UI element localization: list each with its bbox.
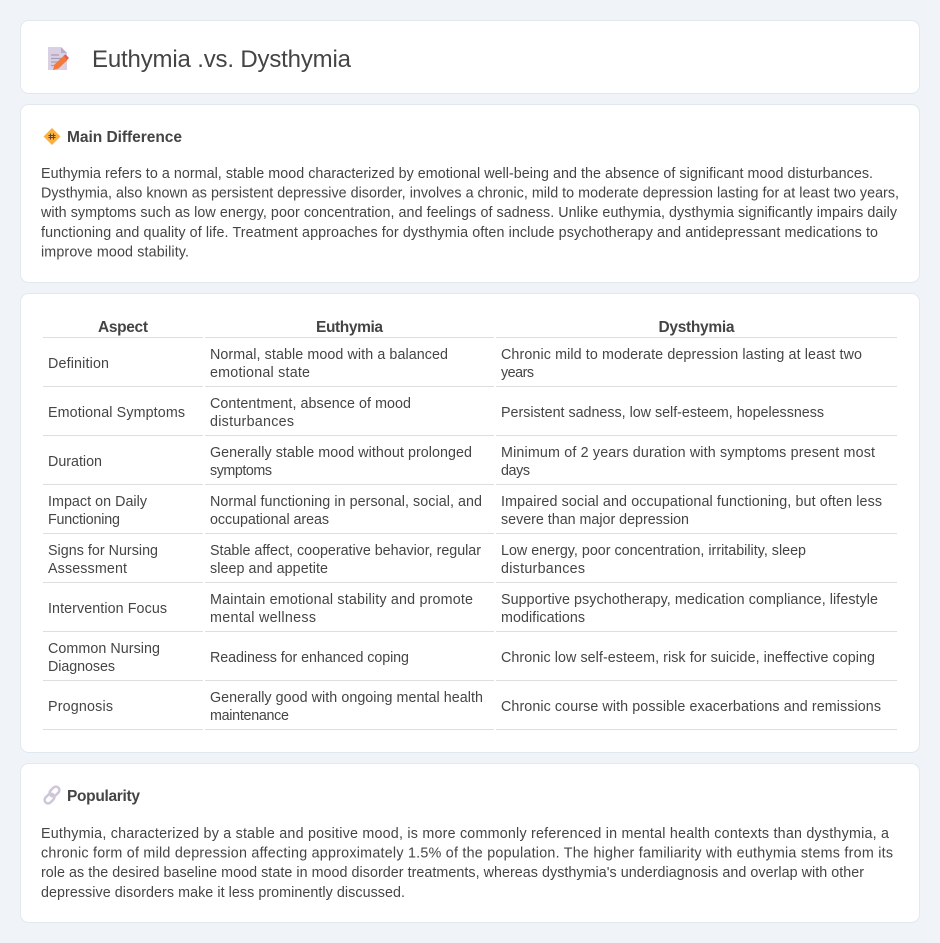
row: duration: Duration xyxy=(48,454,102,470)
text block: main difference paragraph: Dysthymia, also known as persistent depressive disorder, involves a chronic, mild to moderate depression lasting for at least two years, xyxy=(41,186,899,202)
row: definition xyxy=(48,347,862,381)
row: signs for nursing assessment: Stable affect, cooperative behavior, regular xyxy=(210,543,481,559)
text block: main difference paragraph: with symptoms such as low energy, poor concentration, and feelings of sadness. Unlike euthymia, dysthymia significantly impairs daily xyxy=(40,205,898,221)
row: signs for nursing assessment xyxy=(48,543,806,577)
row: common nursing diagnoses: Common Nursing xyxy=(48,641,160,657)
icon: chain link xyxy=(43,785,61,805)
row: intervention focus: mental wellness xyxy=(210,610,316,626)
row: intervention focus: Supportive psychotherapy, medication compliance, lifestyle xyxy=(501,592,878,608)
row: impact on daily functioning: Impaired social and occupational functioning, but often less xyxy=(501,494,882,510)
panel: popularity xyxy=(20,764,920,922)
row: impact on daily functioning: Impact on Daily xyxy=(48,494,148,510)
row: impact on daily functioning: occupational areas xyxy=(210,512,329,528)
row: definition: Chronic mild to moderate depression lasting at least two xyxy=(501,347,862,363)
text block: popularity paragraph: Euthymia, characterized by a stable and positive mood, is more commonly referenced in mental health contexts than dysthymia, a xyxy=(41,826,889,842)
text block: popularity paragraph: chronic form of mild depression affecting approximately 1.5% of the population. The higher familiarity with euthymia stems from its xyxy=(41,846,893,862)
row: impact on daily functioning: severe than major depression xyxy=(501,512,689,528)
row: signs for nursing assessment: sleep and appetite xyxy=(210,561,328,577)
heading: main difference: Main Difference xyxy=(67,129,182,146)
row: emotional symptoms: disturbances xyxy=(210,414,294,430)
row: emotional symptoms: Contentment, absence of mood xyxy=(210,396,411,412)
row: signs for nursing assessment: disturbances xyxy=(501,561,585,577)
row: duration: days xyxy=(501,463,530,479)
table header row: Aspect xyxy=(98,319,148,336)
text block: main difference paragraph xyxy=(40,166,899,260)
row: intervention focus: modifications xyxy=(501,610,585,626)
row: emotional symptoms: Emotional Symptoms xyxy=(48,405,185,421)
text block: popularity paragraph xyxy=(41,826,893,901)
text block: main difference paragraph: functioning and quality of life. Treatment approaches for dysthymia often include psychotherapy and antidepressant medications to xyxy=(41,225,878,241)
panel: comparison table xyxy=(20,294,920,752)
text block: main difference paragraph: Euthymia refers to a normal, stable mood characterized by emotional well-being and the absence of significant mood disturbances. xyxy=(41,166,873,182)
heading: popularity: Popularity xyxy=(67,788,140,805)
row: definition: years xyxy=(501,365,534,381)
row: intervention focus: Maintain emotional stability and promote xyxy=(210,592,473,608)
row: definition: Definition xyxy=(48,356,109,372)
row: duration: Minimum of 2 years duration with symptoms present most xyxy=(501,445,875,461)
row: common nursing diagnoses: Diagnoses xyxy=(48,659,115,675)
row: signs for nursing assessment: Low energy, poor concentration, irritability, sleep xyxy=(501,543,806,559)
text block: popularity paragraph: depressive disorders make it less prominently discussed. xyxy=(41,885,405,901)
icon: orange diamond xyxy=(44,128,60,145)
row: impact on daily functioning: Functioning xyxy=(48,512,120,528)
row: impact on daily functioning xyxy=(48,494,882,528)
row: prognosis: Chronic course with possible exacerbations and remissions xyxy=(501,699,881,715)
row: definition: emotional state xyxy=(210,365,310,381)
row: prognosis xyxy=(48,690,881,724)
row: emotional symptoms xyxy=(48,396,824,430)
table header row xyxy=(98,319,735,336)
row: impact on daily functioning: Normal functioning in personal, social, and xyxy=(210,494,482,510)
row: signs for nursing assessment: Signs for Nursing xyxy=(48,543,158,559)
panel: title header xyxy=(20,20,920,94)
row: duration: Generally stable mood without prolonged xyxy=(210,445,472,461)
row: prognosis: Prognosis xyxy=(48,699,113,715)
row: emotional symptoms: Persistent sadness, low self-esteem, hopelessness xyxy=(501,405,824,421)
row: duration: symptoms xyxy=(210,463,272,479)
icon: document with pencil xyxy=(48,47,69,70)
row: duration xyxy=(48,445,875,479)
panel: main difference xyxy=(20,104,920,282)
text block: main difference paragraph: improve mood stability. xyxy=(41,244,189,260)
row: prognosis: maintenance xyxy=(210,708,289,724)
row: prognosis: Generally good with ongoing mental health xyxy=(210,690,483,706)
text block: popularity paragraph: role as the desired baseline mood state in mood disorder treatments, whereas dysthymia's underdiagnosis and overlap with other xyxy=(41,865,864,881)
row: common nursing diagnoses: Chronic low self-esteem, risk for suicide, ineffective coping xyxy=(501,650,875,666)
title: Euthymia .vs. Dysthymia xyxy=(92,46,352,73)
row: definition: Normal, stable mood with a balanced xyxy=(210,347,448,363)
row: common nursing diagnoses: Readiness for enhanced coping xyxy=(210,650,409,666)
row: intervention focus xyxy=(48,592,878,626)
table header row: Dysthymia xyxy=(658,319,735,336)
row: common nursing diagnoses xyxy=(48,641,875,675)
table header row: Euthymia xyxy=(316,319,383,336)
row: intervention focus: Intervention Focus xyxy=(48,601,167,617)
row: signs for nursing assessment: Assessment xyxy=(48,561,127,577)
